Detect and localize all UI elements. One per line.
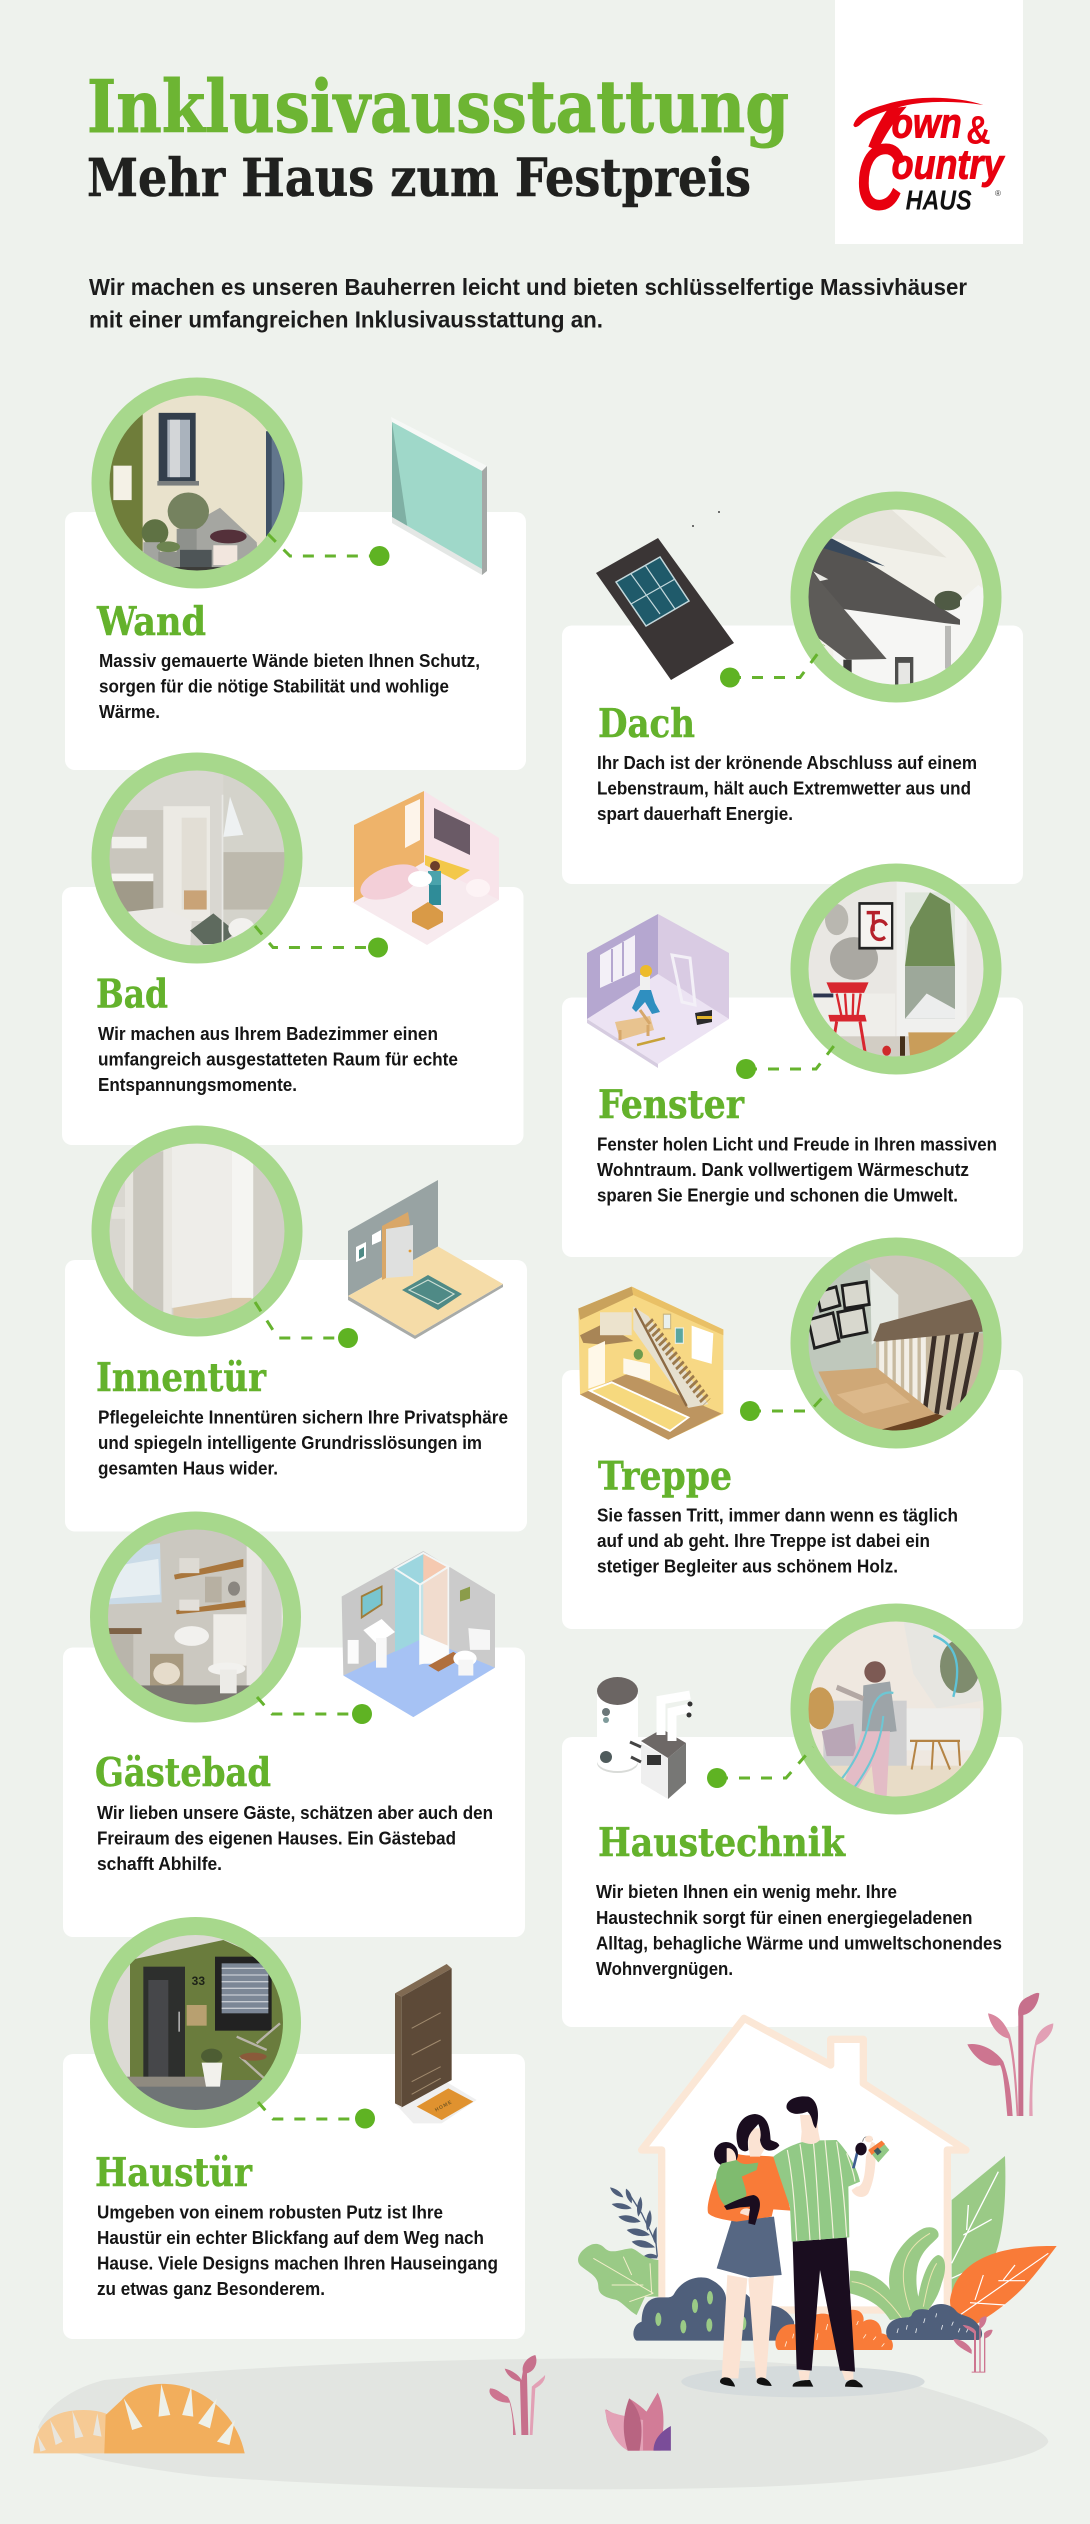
plant: top right pink sprout — [967, 1993, 1053, 2116]
text block: Haustür ein echter Blickfang auf dem Weg nach — [97, 2228, 484, 2248]
text block: auf und ab geht. Ihre Treppe ist dabei ein — [597, 1531, 930, 1551]
photo: Innentür — [110, 1144, 284, 1318]
text block: stetiger Begleiter aus schönem Holz. — [597, 1556, 898, 1576]
intro text: Wir machen es unseren Bauherren leicht und bieten schlüsselfertige Massivhäuser — [89, 274, 967, 300]
text block: umfangreich ausgestatteten Raum für echte — [98, 1050, 458, 1070]
logo: Town & Country Haus: HAUS — [906, 184, 972, 215]
photo ring — [99, 1520, 292, 1714]
icon: front door and mat: HOME — [434, 2099, 454, 2113]
panel: Haustür — [63, 1926, 525, 2339]
icon: room with window installer — [587, 914, 729, 1068]
photo: Treppe — [808, 1256, 984, 1430]
icon: roof with solar panels — [596, 511, 734, 680]
plant: right tall leaf — [952, 2156, 1005, 2293]
text block — [98, 1408, 508, 1478]
panel: Bad — [62, 760, 524, 1145]
icon: bathroom — [352, 791, 499, 945]
ground shape with plants — [33, 2355, 1048, 2489]
text block: Wir bieten Ihnen ein wenig mehr. Ihre — [596, 1882, 897, 1902]
text block: Pflegeleichte Innentüren sichern Ihre Privatsphäre — [98, 1408, 508, 1428]
logo: Town & Country Haus: ountry — [892, 140, 1005, 187]
illustration: family in front of house outline — [578, 2018, 1057, 2387]
plant: navy bush left — [633, 2277, 794, 2341]
panel: Dach — [562, 499, 1023, 884]
logo: Town & Country Haus: own — [892, 99, 962, 146]
plant: navy bush right — [886, 2304, 982, 2340]
house outline — [642, 2018, 966, 2310]
icon: staircase — [578, 1287, 723, 1440]
photo: Gästebad — [108, 1530, 283, 1704]
text block: zu etwas ganz Besonderem. — [97, 2279, 325, 2299]
heading: Fenster — [598, 1082, 744, 1128]
heading: Dach — [598, 701, 695, 747]
logo: Town & Country Haus: & — [966, 108, 991, 152]
plant: orange bush centre — [775, 2310, 893, 2350]
icon: boiler and heat pump — [597, 1677, 692, 1799]
intro text: mit einer umfangreichen Inklusivausstattung an. — [89, 306, 603, 332]
text block: Sie fassen Tritt, immer dann wenn es täglich — [597, 1506, 958, 1526]
text block: gesamten Haus wider. — [98, 1458, 278, 1478]
icon: wall — [391, 417, 487, 575]
text block: Ihr Dach ist der krönende Abschluss auf einem — [597, 753, 977, 773]
text block — [596, 1882, 1002, 1979]
photo: Haustechnik — [808, 1622, 984, 1796]
photo: Wand — [110, 396, 284, 570]
connector — [255, 1302, 358, 1348]
panel: Haustechnik — [562, 1612, 1023, 2027]
photo ring — [800, 500, 992, 694]
photo ring — [800, 1246, 992, 1440]
heading: Haustür — [95, 2150, 252, 2196]
plant: orange bush — [104, 2384, 245, 2453]
heading: Innentür — [96, 1355, 266, 1401]
plant: pink sprout — [489, 2355, 545, 2435]
icon: interior door — [348, 1180, 503, 1339]
photo ring — [100, 762, 294, 954]
title — [87, 64, 789, 209]
icon: front door and mat — [395, 1964, 477, 2123]
panel: Gästebad — [63, 1519, 525, 1937]
text block — [597, 1134, 997, 1206]
photo: Haustür: 33 — [192, 1974, 205, 1988]
plant: pink leafy bush — [605, 2393, 671, 2451]
panel: Innentür — [65, 1132, 527, 1532]
photo: Haustür — [108, 1935, 283, 2110]
text block — [97, 1803, 493, 1874]
logo: Town & Country Haus: ® — [995, 189, 1001, 198]
text block: Alltag, behagliche Wärme und umweltschonendes — [596, 1934, 1002, 1954]
text block: und spiegeln intelligente Grundrisslösungen im — [98, 1433, 482, 1453]
plant: small pink sprout — [953, 2316, 993, 2373]
text block — [597, 753, 977, 824]
intro text — [89, 274, 967, 332]
heading: Bad — [96, 972, 168, 1018]
woman — [708, 2114, 791, 2387]
plant: left navy sprig — [610, 2187, 657, 2258]
connector — [268, 534, 390, 566]
text block: Wohntraum. Dank vollwertigem Wärmeschutz — [597, 1160, 969, 1180]
child — [714, 2142, 760, 2225]
text block: sparen Sie Energie und schonen die Umwelt. — [597, 1186, 958, 1206]
text block: Haustechnik sorgt für einen energiegeladenen — [596, 1908, 972, 1928]
panel: Wand — [65, 385, 526, 770]
text block — [597, 1506, 958, 1576]
connector — [257, 1697, 372, 1724]
panel: Fenster — [562, 872, 1023, 1257]
photo: Bad — [110, 770, 284, 946]
connector — [736, 1038, 840, 1079]
plant: orange leaf — [950, 2246, 1057, 2328]
plant: light orange bush — [33, 2410, 132, 2453]
key and keychain — [853, 2136, 889, 2168]
photo ring — [100, 1134, 294, 1328]
heading: Haustechnik — [598, 1820, 846, 1866]
text block: spart dauerhaft Energie. — [597, 804, 793, 824]
panel: Treppe — [562, 1246, 1023, 1629]
photo: Dach — [808, 510, 978, 684]
text block: Umgeben von einem robusten Putz ist Ihre — [97, 2202, 443, 2222]
title: Inklusivausstattung — [87, 64, 789, 149]
logo: Town & Country Haus — [835, 0, 1023, 244]
photo ring — [800, 872, 992, 1066]
text block: Entspannungsmomente. — [98, 1075, 297, 1095]
text block: sorgen für die nötige Stabilität und wohlige — [99, 676, 449, 696]
text block: Massiv gemauerte Wände bieten Ihnen Schutz, — [99, 651, 480, 671]
text block: Wohnvergnügen. — [596, 1959, 733, 1979]
text block: Wir lieben unsere Gäste, schätzen aber auch den — [97, 1803, 493, 1823]
photo: Fenster — [808, 882, 984, 1056]
text block — [98, 1024, 458, 1095]
plant: right green fronds — [850, 2227, 945, 2320]
family shadow — [681, 2366, 925, 2397]
man — [773, 2096, 889, 2387]
photo ring — [100, 386, 294, 580]
text block — [99, 651, 480, 722]
title: Mehr Haus zum Festpreis — [87, 148, 751, 209]
connector — [740, 1398, 822, 1421]
heading: Wand — [96, 599, 206, 645]
connector — [255, 926, 388, 958]
photo ring — [800, 1612, 992, 1806]
photo ring — [99, 1926, 292, 2119]
connector — [707, 1747, 813, 1788]
text block: Wir machen aus Ihrem Badezimmer einen — [98, 1024, 438, 1044]
text block: Fenster holen Licht und Freude in Ihren massiven — [597, 1134, 997, 1154]
plant: left green leaf — [578, 2244, 658, 2315]
text block: Freiraum des eigenen Hauses. Ein Gästebad — [97, 1828, 456, 1848]
text block: Hause. Viele Designs machen Ihren Hauseingang — [97, 2254, 498, 2274]
text block: schafft Abhilfe. — [97, 1854, 222, 1874]
connector — [720, 645, 824, 688]
text block: Lebenstraum, hält auch Extremwetter aus und — [597, 778, 971, 798]
text block: Wärme. — [99, 702, 160, 722]
logo: Town & Country Haus: C — [856, 124, 905, 230]
heading: Gästebad — [95, 1750, 271, 1796]
heading: Treppe — [598, 1454, 732, 1500]
text block — [97, 2202, 498, 2299]
connector — [258, 2102, 375, 2128]
icon: guest bathroom — [342, 1551, 495, 1717]
